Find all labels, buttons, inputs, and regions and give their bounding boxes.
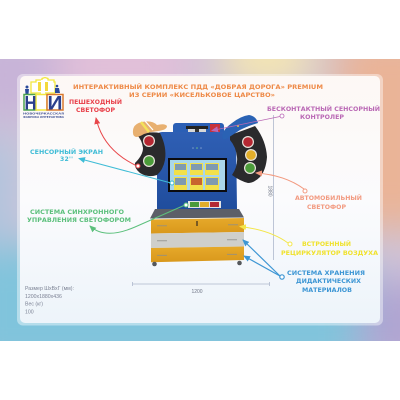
arrows: storage system: [243, 240, 284, 279]
arrow: car light: [256, 173, 307, 193]
label: contactless controller: КОНТРОЛЕР: [300, 114, 345, 121]
dimension labels: [191, 185, 272, 295]
logo: [23, 78, 65, 119]
label: pedestrian light: СВЕТОФОР: [76, 107, 116, 114]
logo: Н: [24, 94, 36, 114]
label: storage system: ДИДАКТИЧЕСКИХ: [296, 278, 361, 285]
label: air recirculator: ВСТРОЕННЫЙ: [302, 239, 351, 248]
label: contactless controller: [267, 104, 380, 121]
label: sync system: УПРАВЛЕНИЯ СВЕТОФОРОМ: [27, 217, 131, 224]
size and weight specs: Вес (кг): [25, 302, 43, 308]
label: pedestrian light: [69, 97, 122, 114]
size and weight specs: [25, 286, 74, 316]
sync control panel: [188, 201, 221, 208]
arrow: contactless controller: [212, 114, 284, 130]
dimension lines: [132, 115, 274, 286]
title: ИНТЕРАКТИВНЫЙ КОМПЛЕКС ПДД «ДОБРАЯ ДОРОГА» PREMIUM: [73, 82, 323, 91]
label: car light: [295, 193, 362, 211]
label: air recirculator: [281, 239, 378, 257]
logo: НОВОЧЕРКАССКАЯ: [23, 112, 65, 116]
indicator dots: [192, 147, 202, 149]
size and weight specs: Размер ШхВхГ (мм):: [25, 286, 74, 292]
label: touch screen: [30, 147, 103, 163]
drawer cabinet: [150, 209, 244, 266]
label: storage system: [287, 270, 365, 294]
dimension labels: 1200: [191, 289, 203, 295]
police cap on right light: [222, 115, 258, 139]
label: car light: СВЕТОФОР: [307, 204, 347, 211]
dimension labels: 1880: [266, 185, 272, 197]
size and weight specs: 100: [25, 310, 34, 316]
label: storage system: МАТЕРИАЛОВ: [302, 287, 352, 294]
label: contactless controller: БЕСКОНТАКТНЫЙ СЕНСОРНЫЙ: [267, 104, 380, 113]
size and weight specs: 1200х1880х436: [25, 294, 62, 300]
label: car light: АВТОМОБИЛЬНЫЙ: [295, 193, 362, 202]
label: sync system: [27, 209, 131, 224]
interactive complex illustration: [133, 115, 267, 266]
blue rear tab with contactless sensor: [173, 123, 224, 139]
touch screen: [168, 158, 227, 192]
cap on left light: [133, 121, 167, 137]
logo: ФАБРИКА ИНТЕРАКТИВА: [23, 115, 64, 119]
blue cabinet body: [157, 132, 237, 213]
label: touch screen: СЕНСОРНЫЙ ЭКРАН: [30, 147, 103, 156]
right car traffic light: [230, 126, 267, 183]
arrow: sync system: [90, 203, 188, 233]
title: [73, 82, 323, 99]
white content panel: [17, 74, 383, 326]
arrow: pedestrian light: [96, 118, 140, 168]
left pedestrian traffic light: [135, 132, 165, 176]
arrow: touch screen: [79, 158, 174, 185]
infographic canvas: [0, 59, 400, 341]
label: storage system: СИСТЕМА ХРАНЕНИЯ: [287, 270, 365, 277]
title: ИЗ СЕРИИ «КИСЕЛЬКОВОЕ ЦАРСТВО»: [129, 92, 275, 99]
label: air recirculator: РЕЦИРКУЛЯТОР ВОЗДУХА: [281, 250, 378, 257]
arrow: air recirculator: [240, 226, 292, 246]
label: touch screen: 32'': [60, 156, 73, 163]
label: pedestrian light: ПЕШЕХОДНЫЙ: [69, 97, 122, 106]
label: sync system: СИСТЕМА СИНХРОННОГО: [30, 209, 124, 216]
gradient background: [0, 59, 400, 341]
logo: И: [48, 94, 62, 114]
